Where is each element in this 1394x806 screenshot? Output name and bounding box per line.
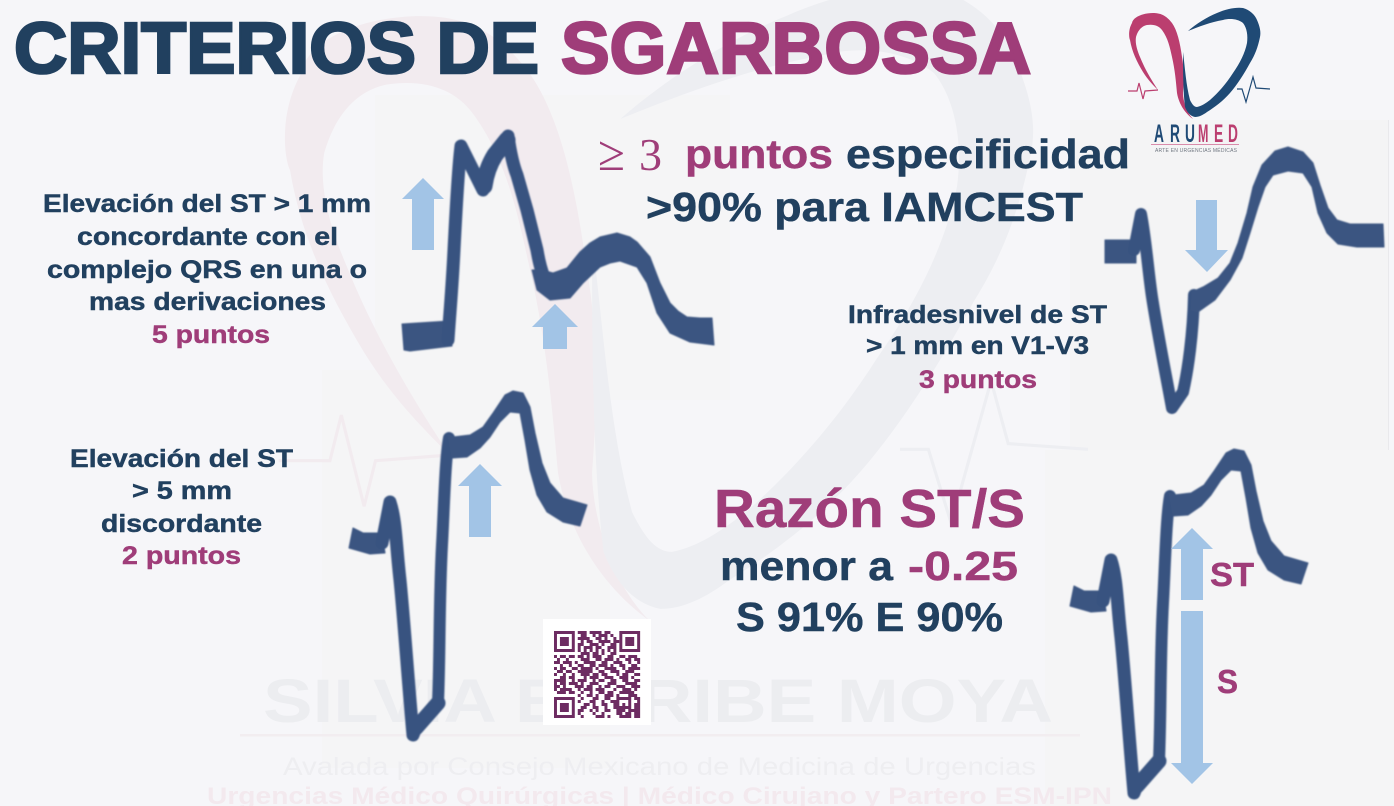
text block: discordant ST elevation: [70, 445, 293, 570]
arrow: up, under ST segment: [532, 304, 578, 349]
heading: points and specificity: 3: [639, 129, 662, 180]
logo: ARUMED: [1128, 8, 1270, 154]
text block: ST/S ratio: -0.25: [908, 543, 1018, 589]
text block: ST depression: Infradesnivel de ST: [848, 301, 1107, 329]
logo: ARUMED: D: [1228, 121, 1238, 148]
logo: ARUMED: M: [1198, 120, 1208, 148]
logo: ARUMED: R: [1170, 121, 1180, 148]
text block: ST/S ratio: S 91% E 90%: [736, 594, 1003, 640]
watermark: large faded logo: [279, 0, 1088, 620]
ECG: discordant ST elevation: [349, 391, 587, 735]
heading: points and specificity: ≥: [598, 125, 625, 181]
text block: discordant ST elevation: discordante: [101, 510, 262, 538]
heading: points and specificity: [598, 125, 1130, 230]
text block: concordant ST elevation: concordante con el: [77, 223, 338, 251]
label: S: S: [1217, 663, 1238, 700]
heading: points and specificity: >90% para IAMCEST: [646, 184, 1083, 230]
text block: ST/S ratio: menor a: [720, 543, 894, 589]
text block: discordant ST elevation: 2 puntos: [122, 542, 241, 570]
ECG: ST/S ratio: [1070, 449, 1308, 793]
arrow: down, above ST depression: [1185, 200, 1228, 272]
watermark: author name: SILVIA E URIBE MOYA: [263, 667, 1053, 735]
ECG: ST depression: [1105, 147, 1384, 408]
arrow: up, discordant ST: [458, 464, 502, 537]
text block: ST depression: 3 puntos: [919, 366, 1037, 394]
label: ST: ST: [1210, 556, 1254, 593]
logo: ARUMED: E: [1214, 121, 1223, 148]
text block: ST depression: > 1 mm en V1-V3: [866, 332, 1089, 360]
arrow: ST magnitude: [1171, 528, 1213, 600]
text block: concordant ST elevation: [43, 190, 371, 349]
text block: concordant ST elevation: mas derivaciones: [89, 288, 326, 316]
logo: ARUMED: ARTE EN URGENCIAS MÉDICAS: [1155, 147, 1238, 154]
text block: discordant ST elevation: Elevación del ST: [70, 445, 293, 473]
watermark: endorsement line: Avalada por Consejo Mexicano de Medicina de Urgencias: [283, 753, 1036, 781]
text block: concordant ST elevation: 5 puntos: [152, 321, 270, 349]
logo: ARUMED: U: [1185, 121, 1195, 148]
heading: points and specificity: especificidad: [846, 131, 1130, 177]
text block: ST depression: [848, 301, 1107, 394]
text block: concordant ST elevation: complejo QRS en una o: [47, 256, 367, 284]
text block: ST/S ratio: [714, 479, 1025, 640]
title: CRITERIOS DE: [14, 9, 539, 89]
text block: concordant ST elevation: Elevación del ST > 1 mm: [43, 190, 371, 218]
arrow: up, beside ST elevation: [402, 178, 444, 250]
QR code: [543, 619, 651, 725]
title: [14, 9, 1031, 89]
ECG: concordant ST elevation: [402, 136, 714, 351]
arrow: S magnitude: [1171, 611, 1213, 784]
text block: ST/S ratio: Razón ST/S: [714, 479, 1025, 539]
heading: points and specificity: puntos: [685, 131, 833, 177]
logo: ARUMED: A: [1154, 121, 1164, 148]
text block: discordant ST elevation: > 5 mm: [132, 477, 232, 505]
title: SGARBOSSA: [561, 9, 1031, 89]
